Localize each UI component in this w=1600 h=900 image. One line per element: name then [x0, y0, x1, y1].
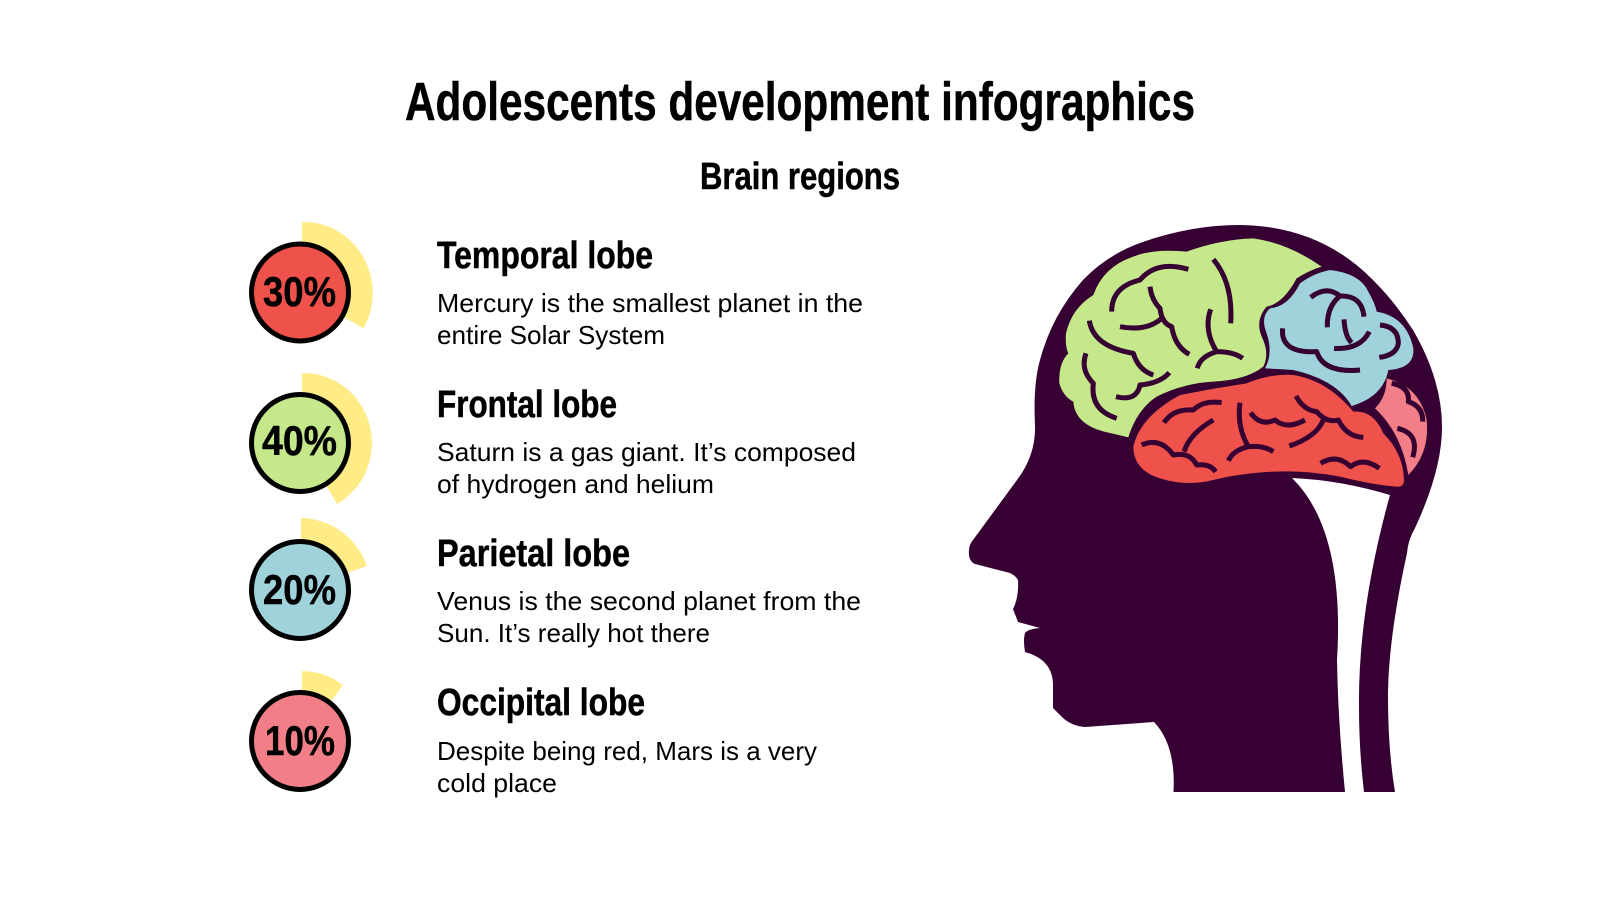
illustration: head with brain: [969, 225, 1442, 792]
gauge: occipital lobe 10%: 10%: [265, 717, 335, 764]
gauge: parietal lobe 20%: 20%: [263, 566, 336, 613]
gauge: temporal lobe 30%: 30%: [263, 268, 336, 315]
item: temporal lobe: Temporal lobe: [437, 235, 653, 277]
gauge: occipital lobe 10%: [252, 671, 348, 790]
item: frontal lobe: Saturn is a gas giant. It’s composed: [437, 437, 856, 467]
brain: parietal lobe: [1264, 270, 1413, 406]
item: occipital lobe: [437, 682, 817, 798]
brain: temporal lobe: [1133, 375, 1404, 487]
item: temporal lobe: Mercury is the smallest planet in the: [437, 288, 863, 318]
item: frontal lobe: [437, 384, 856, 499]
item: parietal lobe: Parietal lobe: [437, 533, 630, 575]
item: frontal lobe: of hydrogen and helium: [437, 469, 714, 499]
item: occipital lobe: cold place: [437, 768, 557, 798]
brain: frontal lobe: [1059, 238, 1322, 437]
title: Adolescents development infographics: [405, 72, 1195, 132]
item: occipital lobe: Occipital lobe: [437, 682, 645, 724]
neck gap: [1292, 478, 1390, 792]
item: frontal lobe: Frontal lobe: [437, 384, 617, 426]
gauge: frontal lobe 40%: 40%: [262, 417, 337, 464]
item: parietal lobe: Sun. It’s really hot there: [437, 618, 710, 648]
subtitle: Brain regions: [700, 156, 900, 198]
item: temporal lobe: [437, 235, 863, 350]
gauge: parietal lobe 20%: [252, 518, 367, 638]
item: occipital lobe: Despite being red, Mars is a very: [437, 736, 817, 766]
item: parietal lobe: Venus is the second planet from the: [437, 586, 861, 616]
brain: occipital lobe: [1375, 378, 1427, 475]
item: temporal lobe: entire Solar System: [437, 320, 665, 350]
gauge: frontal lobe 40%: [252, 373, 372, 504]
gauge: temporal lobe 30%: [252, 222, 373, 341]
item: parietal lobe: [437, 533, 861, 648]
head silhouette: [969, 225, 1442, 792]
brain: [1059, 238, 1427, 487]
